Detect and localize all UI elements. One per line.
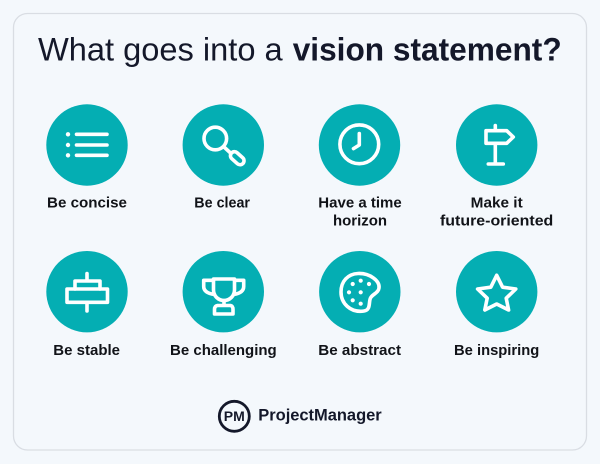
icon: palette — [341, 273, 379, 311]
item: make it future-oriented: future-oriented — [440, 213, 553, 230]
item: be abstract — [318, 251, 401, 359]
label: Make it — [471, 194, 523, 211]
item: be stable — [46, 251, 128, 359]
label: Be concise — [47, 194, 127, 211]
logo mark: PM — [224, 409, 245, 424]
label: Be challenging — [170, 342, 277, 359]
item: make it future-oriented — [440, 104, 553, 230]
icon: signpost — [486, 126, 513, 164]
label: Be stable — [53, 342, 120, 359]
item: be inspiring — [454, 251, 539, 359]
label: Have a time — [318, 194, 402, 211]
icon: list — [66, 132, 107, 158]
item: be clear — [183, 104, 264, 211]
icon: stacked blocks — [67, 274, 108, 311]
label: Be inspiring — [454, 342, 539, 359]
label: Be clear — [194, 194, 250, 211]
icon: star — [478, 275, 516, 310]
logo: ProjectManager — [219, 401, 382, 431]
item: have a time horizon — [318, 104, 402, 230]
item: be concise — [46, 104, 128, 211]
label: Be abstract — [318, 342, 401, 359]
logo mark — [219, 401, 249, 431]
title — [38, 31, 562, 67]
icon: clock — [340, 125, 379, 164]
wordmark: ProjectManager — [258, 407, 382, 425]
title: What goes into a — [38, 31, 284, 67]
item: be challenging — [170, 251, 277, 359]
title: vision statement? — [293, 31, 562, 67]
icon: magnifying glass — [204, 127, 246, 166]
item: have a time horizon: horizon — [333, 213, 387, 230]
icon: trophy — [204, 279, 244, 314]
